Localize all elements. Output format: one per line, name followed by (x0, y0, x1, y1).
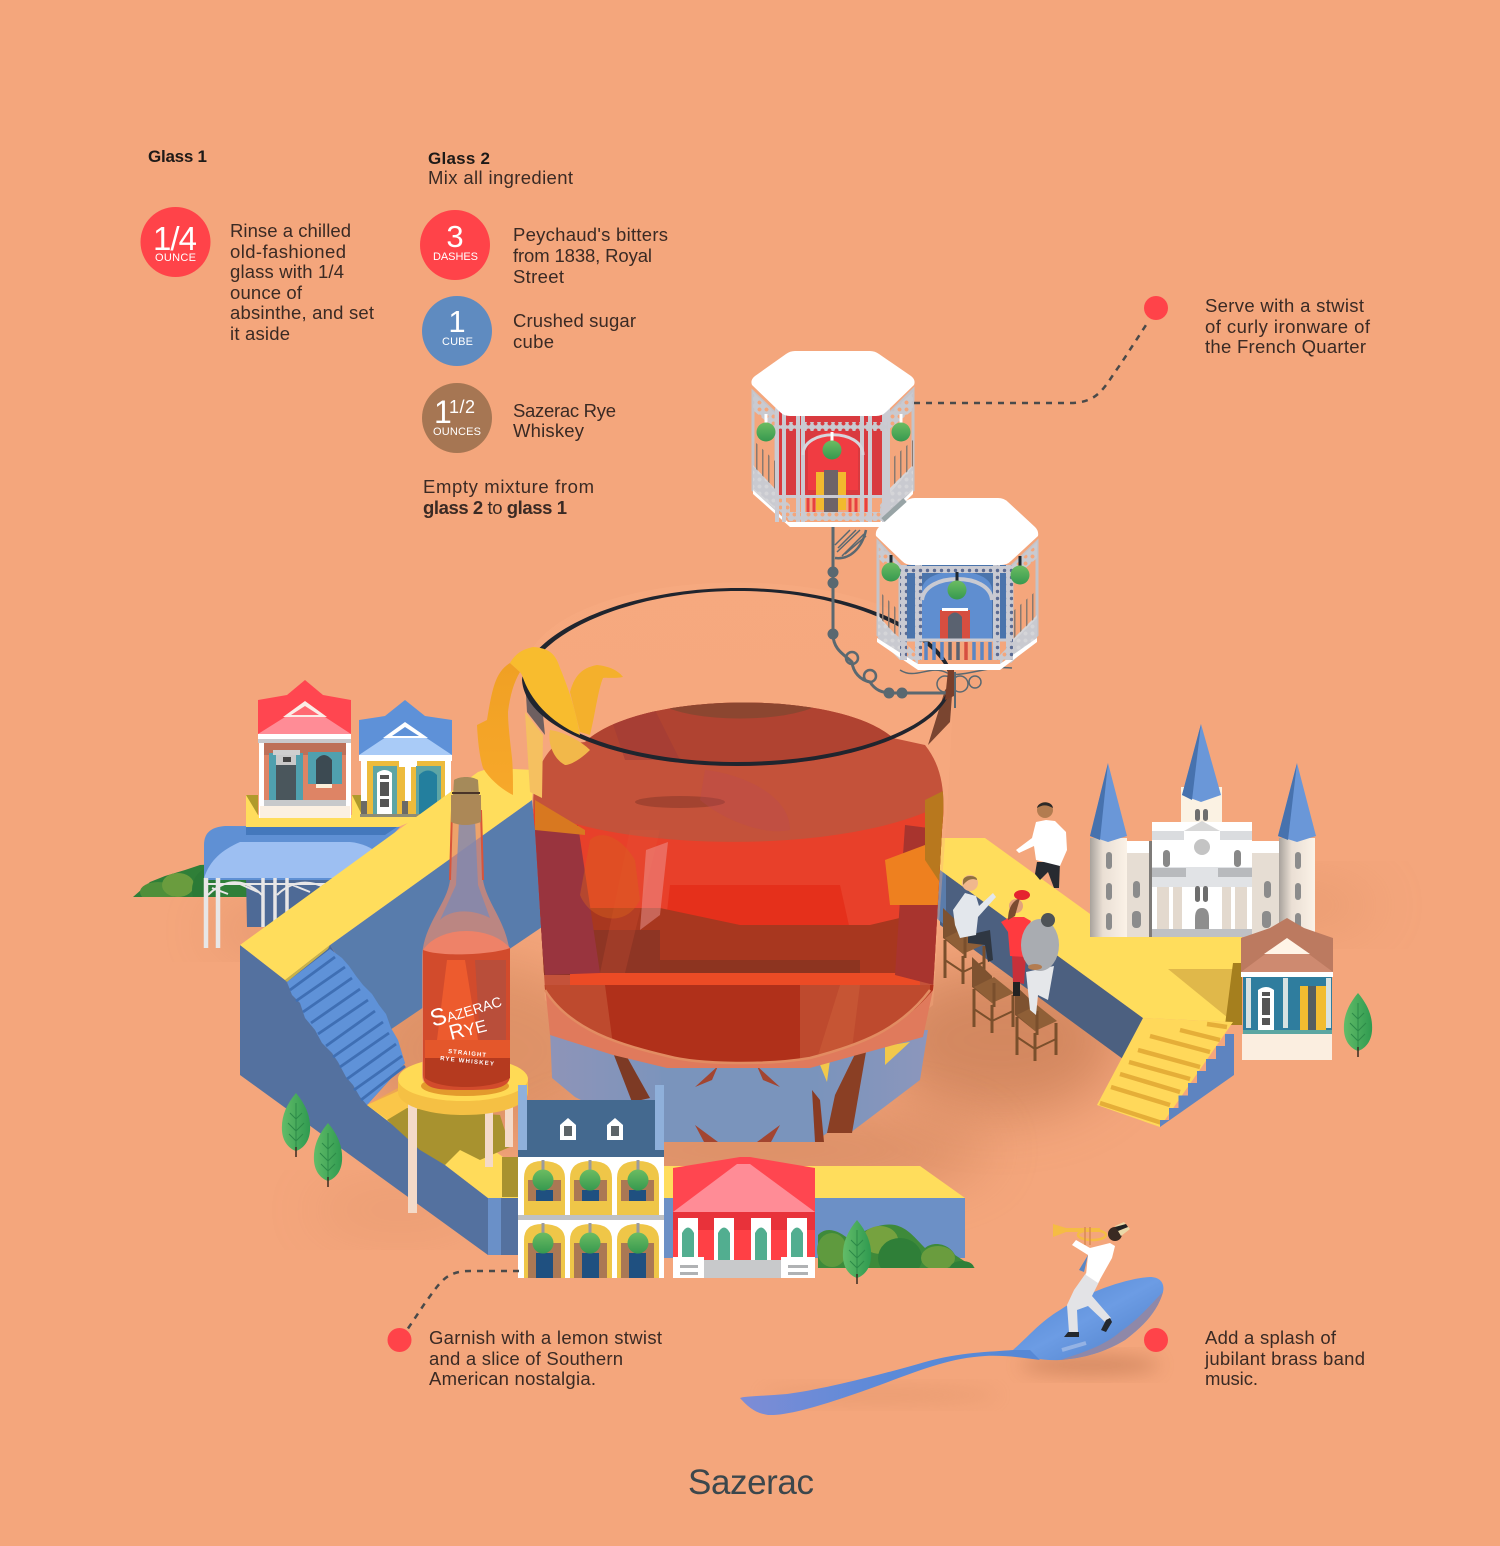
badge: one and a half ounces: 1/2 (449, 397, 475, 417)
roof (751, 351, 915, 416)
yellow stairs (1097, 1018, 1234, 1127)
bottle label (427, 986, 504, 1068)
heading: glass 2 (428, 149, 573, 188)
table shadow (387, 1108, 510, 1165)
shadow on walkway (1168, 969, 1233, 1022)
bottle label: RYE (447, 1013, 489, 1045)
glass rim (522, 588, 953, 766)
rim inner dark wall (525, 678, 545, 735)
left shotgun houses on terrace (204, 680, 452, 948)
red roof house (258, 680, 351, 818)
text: sugar: Crushed sugar (513, 310, 636, 331)
badge: one cube (422, 296, 492, 366)
icon: leaf right (1344, 993, 1372, 1057)
text: rinse instruction (230, 220, 374, 344)
bottom blue-roof building (518, 1085, 664, 1278)
blue wall (900, 565, 1012, 640)
bush: left (133, 864, 246, 897)
yellow terrace (246, 795, 428, 827)
callout: garnish: American nostalgia. (429, 1368, 596, 1389)
badge: one quarter ounce: 1/4 (153, 220, 197, 257)
shoes (1064, 1318, 1112, 1337)
text: bitters (513, 224, 668, 287)
badge: one quarter ounce: OUNCE (155, 252, 196, 264)
whisky lower sides (545, 985, 934, 1068)
liquid (533, 702, 944, 1062)
badge: one and a half ounces: OUNCES (433, 426, 481, 438)
rocks glass with sazerac (477, 582, 960, 1142)
lanterns (756, 414, 910, 460)
bottle label: STRAIGHT (448, 1049, 487, 1059)
lattice (900, 565, 907, 660)
side table (398, 1057, 528, 1213)
bottle glass (422, 802, 510, 1094)
badge: one cube: 1 (448, 304, 466, 339)
right lower platform (664, 1166, 965, 1258)
heading: glass 2: Glass 2 (428, 149, 490, 168)
copper base arc (545, 990, 930, 1063)
lanterns (882, 555, 1030, 600)
blue awning building (204, 825, 400, 948)
yellow lower landing (367, 1087, 518, 1198)
text: sugar: cube (513, 331, 554, 352)
right platform with bar and stairs (936, 838, 1242, 1127)
callout: brass band: music. (1205, 1368, 1258, 1389)
steps (673, 1257, 815, 1278)
side bays (877, 542, 1037, 670)
gazebo: blue (876, 498, 1038, 670)
head (1108, 1227, 1122, 1241)
text: bitters: from 1838, Royal (513, 245, 652, 266)
callout: serve with a twist: Serve with a stwist (1205, 295, 1364, 316)
glass base (550, 1030, 928, 1142)
text: rinse instruction: ounce of (230, 282, 303, 303)
text: rinse instruction: old-fashioned (230, 241, 346, 262)
roof (876, 498, 1038, 565)
balcony bars (808, 497, 866, 512)
text: whiskey (513, 400, 616, 441)
right tower (1278, 763, 1316, 937)
callout: brass band: jubilant brass band (1204, 1348, 1365, 1369)
man in grey (1021, 913, 1059, 1015)
badge: one cube: CUBE (442, 336, 473, 348)
panel: glass 1 recipe (140, 147, 374, 344)
church windows (1106, 852, 1301, 930)
text: bitters: Street (513, 266, 564, 287)
badge: three dashes (420, 210, 490, 280)
text: bitters: Peychaud's bitters (513, 224, 668, 245)
cork (451, 795, 481, 825)
badge: three dashes: DASHES (433, 251, 478, 263)
callout: serve with a twist: the French Quarter (1205, 336, 1366, 357)
whiskey bottle (421, 777, 510, 1096)
ground shadows (210, 883, 1380, 1403)
text: rinse instruction: Rinse a chilled (230, 220, 351, 241)
house right, blue with terracotta roof (1241, 918, 1333, 1060)
iron pipe ornament (829, 526, 1012, 708)
red roof building (673, 1157, 815, 1278)
pants (1067, 1273, 1111, 1332)
blue stairs (287, 949, 405, 1105)
central facade (1152, 821, 1252, 937)
callout: serve with a twist: of curly ironware of (1205, 316, 1371, 337)
columns (678, 1218, 807, 1262)
rim brown reflection, right side (928, 682, 953, 745)
stair backing (285, 945, 405, 1105)
central tower (1181, 724, 1222, 832)
callout: brass band (1144, 1327, 1365, 1389)
text: sugar (513, 310, 636, 352)
badge: one and a half ounces (422, 383, 492, 453)
icon: leaves left (282, 1093, 342, 1187)
blue roof house (359, 700, 452, 817)
text: empty mixture (423, 476, 594, 518)
icon: leaf lower (843, 1220, 871, 1284)
door (816, 472, 846, 510)
glass upper wall (522, 582, 953, 1053)
outer blue wall (240, 945, 518, 1255)
panel: glass 2 recipe (420, 149, 668, 518)
callout: garnish: Garnish with a lemon stwist (429, 1327, 662, 1348)
whiskey fill (421, 1076, 509, 1096)
left tower (1090, 763, 1127, 937)
heading: glass 2: Mix all ingredient (428, 167, 573, 188)
text: whiskey: Sazerac Rye (513, 400, 616, 421)
yellow walkway (240, 768, 535, 980)
people at the bar (943, 802, 1067, 1061)
lemon strip seen through the glass (525, 712, 543, 798)
text: empty mixture: glass 2 to glass 1 (423, 497, 567, 518)
heading: glass 1: Glass 1 (148, 147, 207, 166)
wings (1127, 841, 1279, 937)
jacket (1072, 1240, 1115, 1283)
spoon (740, 1277, 1163, 1415)
trumpet (1053, 1224, 1106, 1245)
chairs (943, 908, 1057, 1061)
trumpet player (1053, 1222, 1130, 1337)
badge: three dashes: 3 (446, 219, 464, 254)
text: rinse instruction: it aside (230, 323, 290, 344)
title: Sazerac (688, 1463, 814, 1502)
callout: brass band: Add a splash of (1205, 1327, 1337, 1348)
inner blue wall (330, 800, 545, 1032)
gazebo: red (751, 351, 915, 527)
callout: garnish (388, 1271, 662, 1389)
text: rinse instruction: glass with 1/4 (230, 261, 344, 282)
seated man (953, 875, 996, 962)
left platform and stairs (240, 768, 545, 1255)
text: empty mixture: Empty mixture from (423, 476, 594, 497)
bush: lower right (817, 1224, 975, 1268)
ironwork (777, 408, 888, 522)
red wall (777, 408, 888, 498)
dark blue wall (940, 870, 1143, 1062)
yellow walkway (940, 838, 1242, 1022)
woman in red (1001, 890, 1031, 996)
callout: serve with a twist (914, 295, 1371, 403)
text: whiskey: Whiskey (513, 420, 585, 441)
lower arches (524, 1223, 659, 1278)
bottle label: RYE WHISKEY (440, 1056, 494, 1068)
callout: garnish: and a slice of Southern (429, 1348, 623, 1369)
front wall accent (488, 1198, 501, 1255)
badge: one quarter ounce (140, 207, 210, 277)
text: rinse instruction: absinthe, and set (230, 302, 374, 323)
church (1090, 724, 1316, 937)
badge: one and a half ounces: 1 (434, 394, 452, 430)
door (940, 610, 970, 640)
waiter (1016, 802, 1067, 888)
balcony bars (926, 642, 942, 660)
side bays (753, 390, 913, 527)
lemon twist (477, 647, 623, 795)
upper arches (524, 1160, 659, 1215)
bottle label: SAZERAC (427, 986, 504, 1033)
lemon blob inside the glass (549, 730, 590, 765)
